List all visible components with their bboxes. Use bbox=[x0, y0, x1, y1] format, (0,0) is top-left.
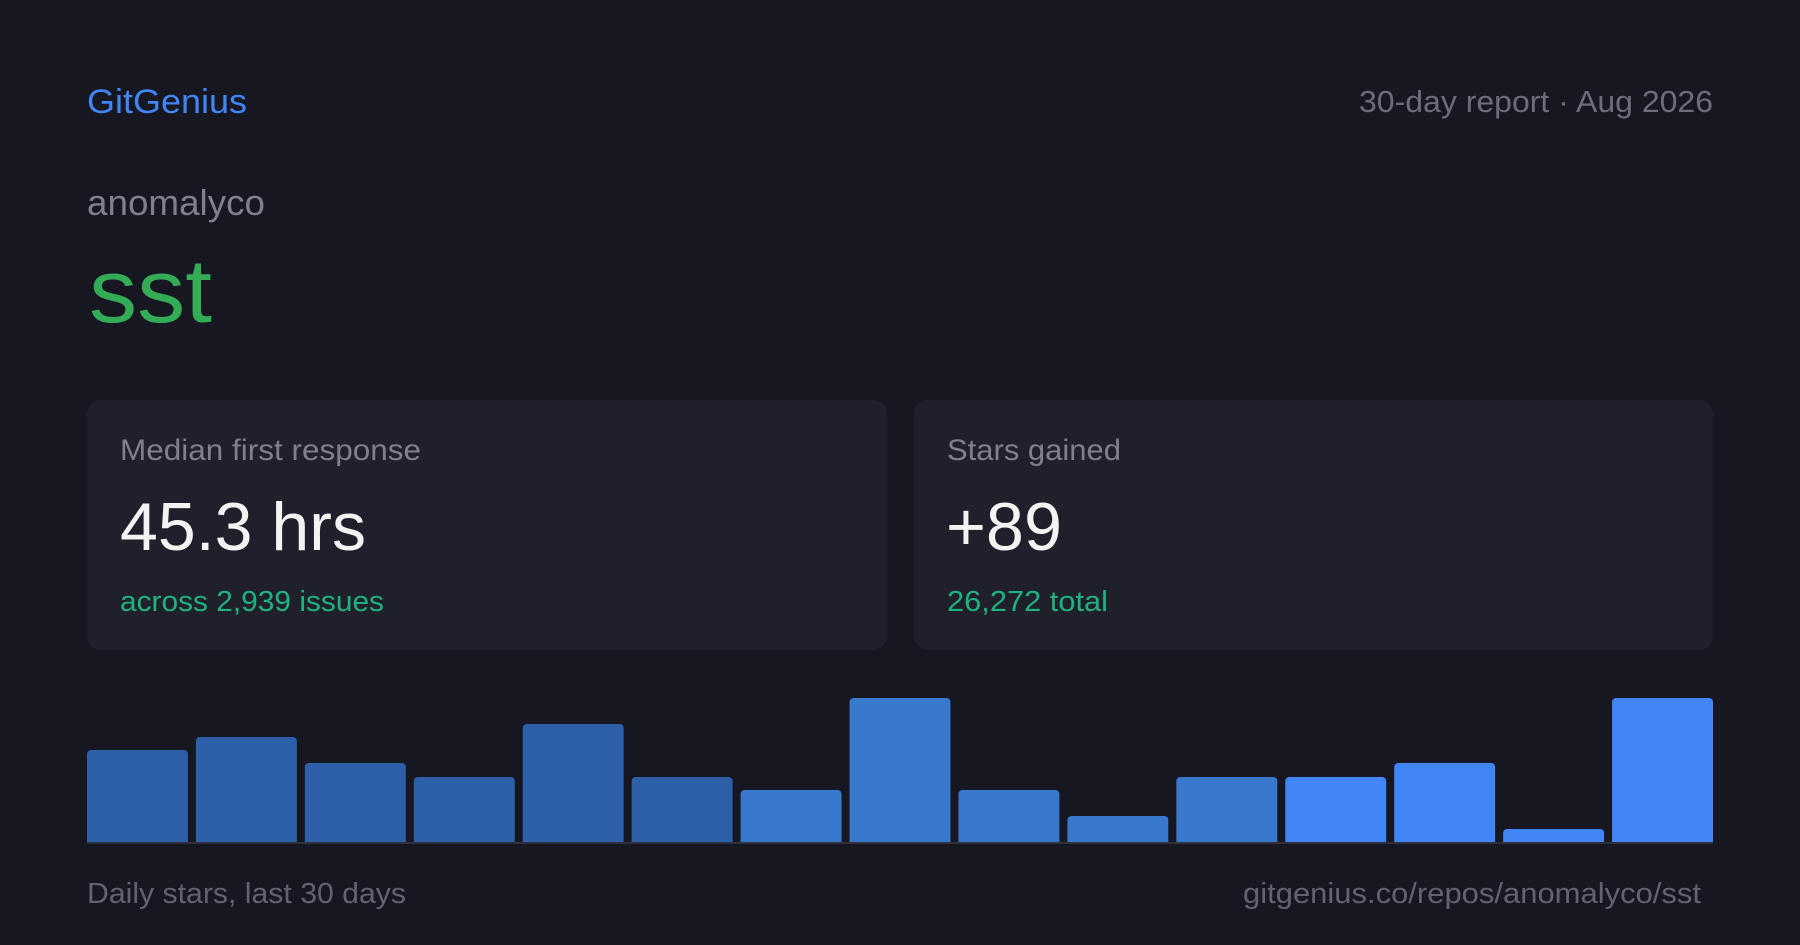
panel: stars gained bbox=[914, 400, 1713, 650]
card value: 45.3 hrs bbox=[120, 489, 366, 565]
card value: +89 bbox=[946, 489, 1062, 565]
chart caption: Daily stars, last 30 days bbox=[87, 878, 406, 910]
card label: Median first response bbox=[120, 434, 421, 467]
card subtext: across 2,939 issues bbox=[120, 586, 384, 618]
bar chart: daily stars bbox=[87, 698, 1713, 844]
repository title: sst bbox=[89, 242, 212, 342]
brand: GitGenius: GitGenius bbox=[87, 83, 247, 121]
owner name: anomalyco bbox=[87, 182, 265, 223]
panel: median first response bbox=[87, 400, 887, 650]
report period: 30-day report · Aug 2026 bbox=[1359, 84, 1713, 119]
card subtext: 26,272 total bbox=[947, 586, 1108, 618]
card label: Stars gained bbox=[947, 434, 1121, 467]
repository url: gitgenius.co/repos/anomalyco/sst bbox=[1243, 878, 1701, 910]
